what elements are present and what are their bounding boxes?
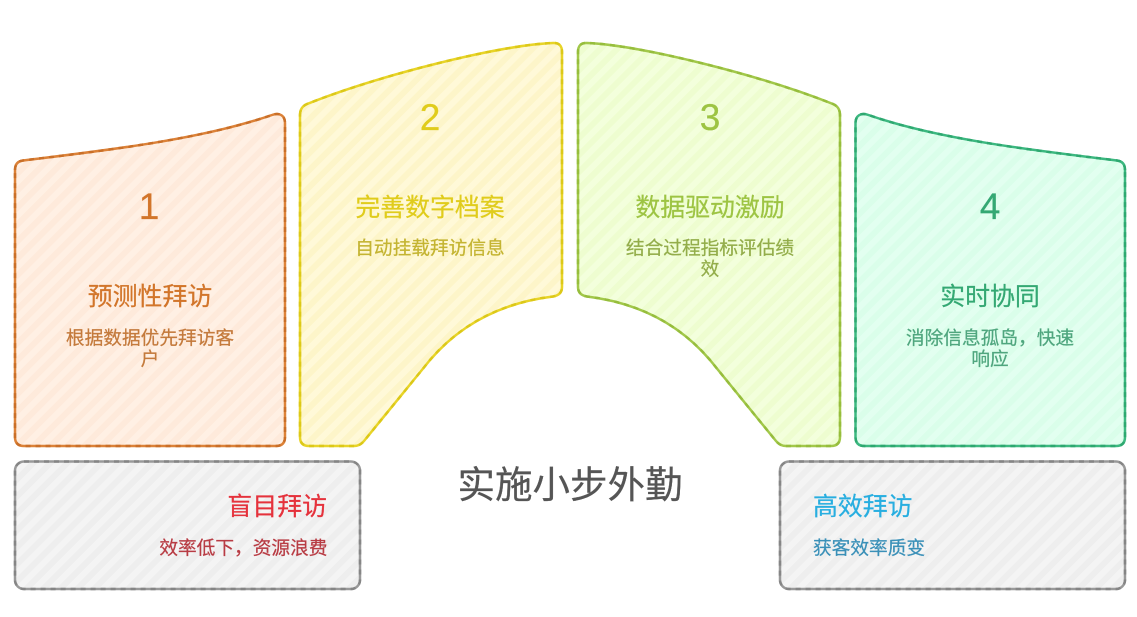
- step number 3: 3: [700, 97, 720, 138]
- description: 获客效率质变: 获客效率质变: [813, 538, 925, 558]
- description: 消除信息孤岛，快速响应: 消除信息孤岛，快速: [906, 328, 1074, 348]
- description: 结合过程指标评估绩效: 效: [701, 258, 720, 280]
- heading: 实时协同: 实时协同: [940, 283, 1040, 311]
- heading: 盲目拜访: 盲目拜访: [227, 493, 327, 521]
- description: 结合过程指标评估绩效: 结合过程指标评估绩: [626, 238, 794, 258]
- heading: 预测性拜访: 预测性拜访: [88, 283, 212, 311]
- step number 2: 2: [420, 97, 440, 138]
- description: 自动挂载拜访信息: 自动挂载拜访信息: [355, 238, 505, 258]
- panel: before 盲目拜访: [15, 462, 360, 589]
- heading: 完善数字档案: 完善数字档案: [355, 194, 505, 222]
- description: 根据数据优先拜访客户: 户: [141, 348, 159, 370]
- panel: after 高效拜访: [780, 462, 1125, 589]
- description: 效率低下，资源浪费: 效率低下，资源浪费: [159, 538, 328, 558]
- panel: step 2 完善数字档案: [300, 43, 562, 446]
- description: 根据数据优先拜访客户: 根据数据优先拜访客: [66, 328, 234, 348]
- title: 实施小步外勤: [458, 464, 682, 506]
- heading: 高效拜访: 高效拜访: [813, 493, 913, 521]
- step number 1: 1: [139, 186, 159, 227]
- description: 消除信息孤岛，快速响应: 响应: [971, 348, 1009, 370]
- heading: 数据驱动激励: 数据驱动激励: [635, 194, 785, 222]
- step number 4: 4: [980, 186, 1000, 227]
- panel: step 3 数据驱动激励: [578, 43, 840, 446]
- panel: step 4 实时协同: [856, 114, 1125, 446]
- panel: step 1 预测性拜访: [15, 114, 285, 446]
